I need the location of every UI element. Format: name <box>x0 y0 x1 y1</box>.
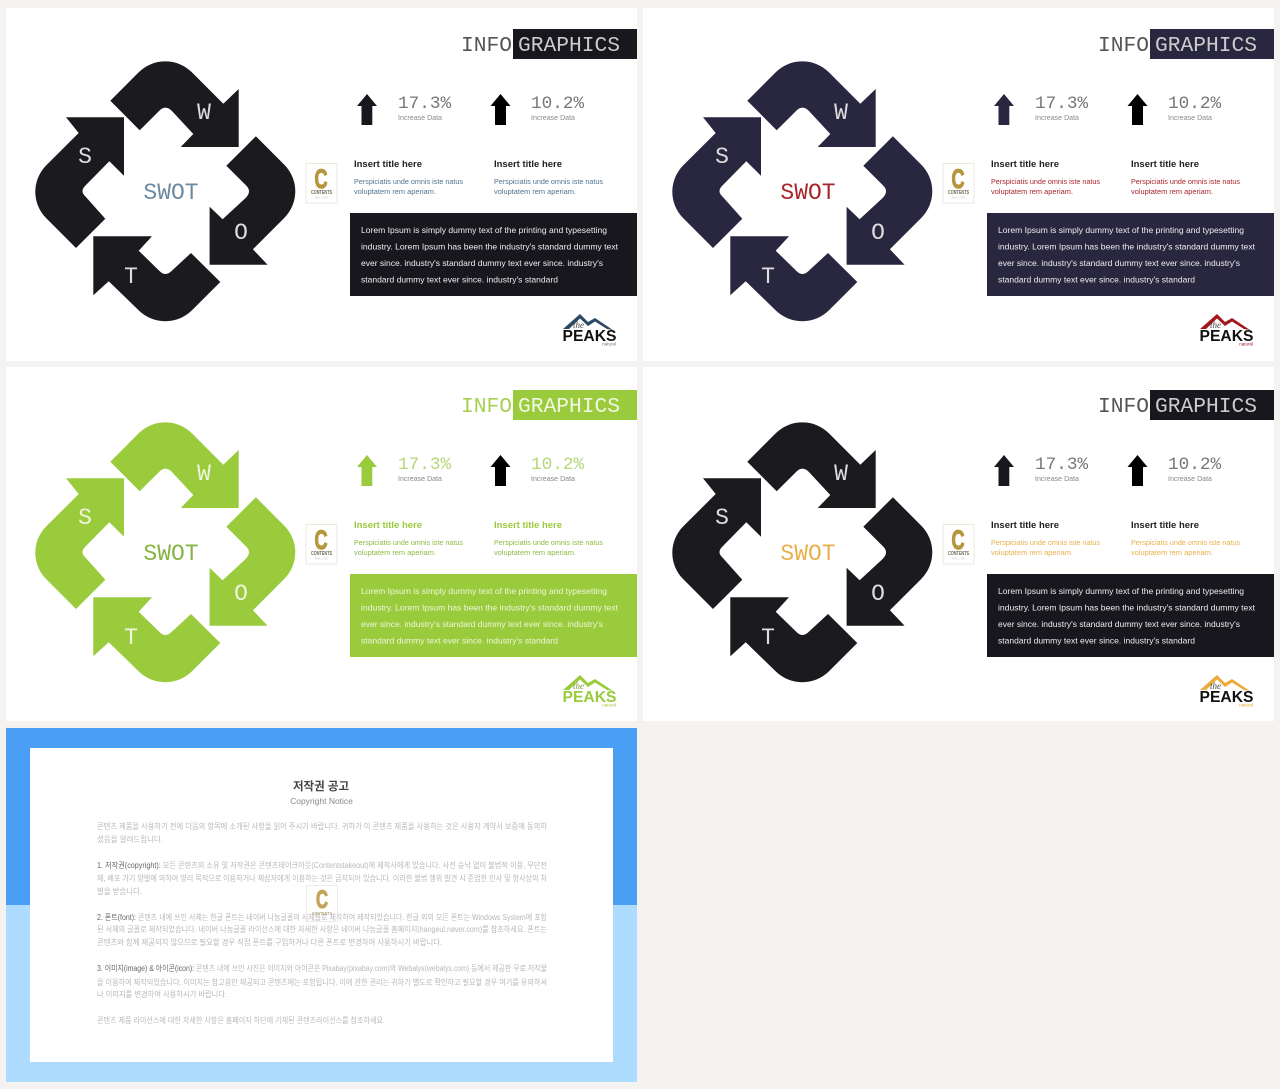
heading: infographics title: INFO <box>1098 34 1149 58</box>
text block: right column: voluptatem rem aperiam. <box>494 548 576 557</box>
chart: SWOT arrow cycle: T <box>761 625 775 651</box>
callout: lorem ipsum: standard dummy text ever since. industry's standard <box>998 636 1195 646</box>
text block: right column <box>1131 159 1240 196</box>
panel: SWOT infographic green <box>6 367 637 721</box>
text block: left column <box>991 159 1100 196</box>
text block: right column: Insert title here <box>1131 520 1199 531</box>
callout: lorem ipsum <box>350 574 637 657</box>
text block: left column: Perspiciatis unde omnis iste natus <box>991 177 1100 186</box>
callout: lorem ipsum: Lorem Ipsum is simply dummy text of the printing and typesetting <box>361 586 607 596</box>
text block: right column <box>494 520 603 557</box>
heading: infographics title: INFO <box>461 34 512 58</box>
text block: right column: Insert title here <box>1131 159 1199 170</box>
stat: 17.3%: 17.3% <box>1035 455 1088 475</box>
heading: copyright notice title <box>290 779 353 806</box>
logo: contents: C <box>952 525 964 555</box>
text block: copyright intro <box>97 821 548 844</box>
chart: SWOT arrow cycle: O <box>871 220 885 246</box>
stat: 17.3%: 17.3% <box>1035 94 1088 114</box>
logo: contents: C <box>314 525 328 555</box>
text block: left column <box>991 520 1100 557</box>
text block: left column: Perspiciatis unde omnis iste natus <box>354 538 463 547</box>
logo: peaks: the <box>1210 681 1221 691</box>
text block: copyright clause <box>97 860 547 896</box>
chart: SWOT arrow cycle: SWOT <box>143 180 199 206</box>
text block: image clause: 을 이용하여 제작되었습니다. 이미지는 참고용만 제공되고 콘텐츠에는 포함됩니다. 이에 관한 권리는 귀하가 별도로 확인하고 필요할 경우 여기를 유의하셔 <box>97 977 547 987</box>
heading: infographics title: INFO <box>1098 395 1149 419</box>
text block: right column: Perspiciatis unde omnis iste natus <box>1131 538 1240 547</box>
text block: font clause <box>97 912 548 947</box>
logo: contents watermark: CONTENTS <box>312 911 332 916</box>
stat: 17.3%: 17.3% <box>398 94 451 114</box>
text block: left column: voluptatem rem aperiam. <box>991 187 1073 196</box>
callout: lorem ipsum <box>987 574 1274 657</box>
panel: SWOT infographic dark <box>6 8 637 361</box>
chart: SWOT arrow cycle: O <box>234 581 248 607</box>
stat: 10.2% <box>1128 94 1221 125</box>
logo: contents watermark: C <box>316 886 328 914</box>
chart: SWOT arrow cycle: SWOT <box>780 541 836 567</box>
text block: right column: Insert title here <box>494 520 562 531</box>
panel: SWOT infographic navy and red <box>643 8 1274 361</box>
stat: 17.3%: Increase Data <box>1035 113 1080 122</box>
text block: left column: Insert title here <box>991 159 1059 170</box>
logo: peaks: PEAKS <box>562 328 617 345</box>
logo: peaks: natural <box>602 342 616 346</box>
panel: SWOT infographic black and orange <box>643 367 1274 721</box>
chart: SWOT arrow cycle <box>672 422 932 682</box>
callout: lorem ipsum: standard dummy text ever since. industry's standard <box>361 636 558 646</box>
logo: peaks <box>1200 675 1254 708</box>
heading: infographics title <box>461 29 637 59</box>
stat: 10.2%: Increase Data <box>531 474 576 483</box>
stat: 10.2% <box>490 94 584 125</box>
logo: peaks: natural <box>1239 342 1253 346</box>
text block: left column: Perspiciatis unde omnis iste natus <box>354 177 463 186</box>
heading: infographics title: GRAPHICS <box>518 34 620 58</box>
stat: 17.3% <box>994 94 1088 125</box>
callout: lorem ipsum: standard dummy text ever since. industry's standard <box>361 274 558 284</box>
logo: peaks <box>1200 314 1254 346</box>
heading: infographics title <box>1098 390 1274 420</box>
logo: peaks: the <box>573 320 584 330</box>
text block: left column: Perspiciatis unde omnis iste natus <box>991 538 1100 547</box>
logo: contents: CONTENTS <box>948 551 970 557</box>
text block: copyright clause: 재, 배포 가기 양벌에 의하여 영리 목적으로 이용하거나 제삼자에게 이용하는 것은 금지되어 있습니다. 이러한 불법 행위 발견 시 준엄한 민사 및 형사상의 처 <box>97 873 547 883</box>
stat: 17.3%: Increase Data <box>1035 474 1080 483</box>
chart: SWOT arrow cycle: W <box>834 100 848 126</box>
chart: SWOT arrow cycle: S <box>715 144 729 170</box>
heading: infographics title: GRAPHICS <box>518 395 620 419</box>
logo: contents: CONTENTS <box>311 551 333 557</box>
heading: infographics title: INFO <box>461 395 512 419</box>
chart: SWOT arrow cycle: SWOT <box>143 541 199 567</box>
text block: right column <box>1131 520 1240 557</box>
logo: peaks: PEAKS <box>1200 328 1254 345</box>
logo: contents: REAL CODE <box>315 196 328 200</box>
callout: lorem ipsum: Lorem Ipsum is simply dummy text of the printing and typesetting <box>998 225 1244 235</box>
text block: copyright intro: 셨음을 알려드립니다. <box>97 834 163 844</box>
heading: copyright notice title: Copyright Notice <box>290 796 353 806</box>
text block: right column <box>494 159 603 196</box>
text block: left column: Insert title here <box>354 159 422 170</box>
text block: font clause: 콘텐츠와 함께 제공되지 않으므로 필요할 경우 직접 폰트를 구입하거나 다른 폰트로 변경하여 사용하시기 바랍니다. <box>97 937 442 947</box>
logo: contents <box>943 164 974 203</box>
stat: 10.2% <box>1128 455 1221 486</box>
heading: copyright notice title: 저작권 공고 <box>293 779 349 793</box>
logo: contents: REAL CODE <box>952 556 965 560</box>
logo: peaks: the <box>1210 320 1221 330</box>
text block: left column: voluptatem rem aperiam. <box>354 548 436 557</box>
text block: copyright clause: 1. 저작권(copyright): 모든 콘텐츠의 소유 및 저작권은 콘텐츠테이크아웃(Contentstakeout)에 제작사에게 있습니다. 사전 승낙 없이 불법적 이용, 무단전 <box>97 860 547 870</box>
callout: lorem ipsum: industry. Lorem Ipsum has been the industry's standard dummy text <box>361 602 619 612</box>
stat: 10.2%: 10.2% <box>531 94 584 114</box>
callout: lorem ipsum <box>987 213 1274 296</box>
text block: right column: Insert title here <box>494 159 562 170</box>
stat: 17.3%: 17.3% <box>398 455 451 475</box>
chart: SWOT arrow cycle: T <box>124 264 138 290</box>
text block: left column: Insert title here <box>354 520 422 531</box>
stat: 17.3% <box>994 455 1088 486</box>
chart: SWOT arrow cycle: T <box>761 264 775 290</box>
callout: lorem ipsum: ever since. industry's standard dummy text ever since. industry's <box>361 258 603 268</box>
text block: license note: 콘텐츠 제품 라이선스에 대한 자세한 사항은 홈페이지 하단에 기재된 콘텐츠라이선스를 참조하세요. <box>97 1015 385 1025</box>
text block: font clause: 된 서체의 글꼴로 제작되었습니다. 네이버 나눔글꼴 라이선스에 대한 자세한 사항은 네이버 나눔글꼴 홈페이지(hangeul.naver.com)를 참조하세요. 폰트는 <box>97 924 547 934</box>
logo: contents: C <box>952 164 964 194</box>
stat: 10.2%: 10.2% <box>531 455 584 475</box>
callout: lorem ipsum: standard dummy text ever since. industry's standard <box>998 274 1195 284</box>
chart: SWOT arrow cycle: O <box>871 581 885 607</box>
stat: 17.3%: Increase Data <box>398 474 443 483</box>
text block: right column: voluptatem rem aperiam. <box>1131 187 1213 196</box>
logo: peaks: the <box>573 681 584 691</box>
text block: left column: voluptatem rem aperiam. <box>354 187 436 196</box>
text block: image clause: 3. 이미지(image) & 아이콘(icon): 콘텐츠 내에 쓰인 사진은 이미지와 아이콘은 Pixabay(pixabay.com)와 Webalys(webalys.com) 등에서 제공한 무료 저작물 <box>97 963 547 973</box>
logo: contents <box>943 524 974 564</box>
stat: 10.2%: Increase Data <box>531 113 576 122</box>
text block: image clause: 나 이미지를 변경하여 사용하시기 바랍니다. <box>97 989 227 999</box>
logo: contents watermark <box>306 886 338 922</box>
text block: right column: Perspiciatis unde omnis iste natus <box>494 177 603 186</box>
chart: SWOT arrow cycle: T <box>124 625 138 651</box>
callout: lorem ipsum: industry. Lorem Ipsum has been the industry's standard dummy text <box>998 602 1256 612</box>
chart: SWOT arrow cycle: S <box>715 505 729 531</box>
chart: SWOT arrow cycle <box>672 61 932 321</box>
callout: lorem ipsum: Lorem Ipsum is simply dummy text of the printing and typesetting <box>998 586 1244 596</box>
logo: peaks <box>562 314 617 346</box>
text block: copyright clause: 벌을 받습니다. <box>97 886 142 896</box>
text block: right column: Perspiciatis unde omnis iste natus <box>494 538 603 547</box>
chart: SWOT arrow cycle: W <box>197 461 211 487</box>
logo: peaks <box>562 675 617 708</box>
logo: contents: REAL CODE <box>315 556 328 560</box>
text block: right column: Perspiciatis unde omnis iste natus <box>1131 177 1240 186</box>
heading: infographics title: GRAPHICS <box>1155 395 1257 419</box>
stat: 17.3% <box>357 455 451 486</box>
panel: copyright notice <box>6 728 637 1082</box>
stat: 10.2%: 10.2% <box>1168 455 1221 475</box>
text block: right column: voluptatem rem aperiam. <box>494 187 576 196</box>
heading: infographics title <box>461 390 637 420</box>
logo: peaks: natural <box>602 702 616 708</box>
logo: contents: REAL CODE <box>952 196 965 200</box>
stat: 10.2%: Increase Data <box>1168 113 1213 122</box>
text block: left column <box>354 159 463 196</box>
logo: contents <box>306 524 337 564</box>
heading: infographics title <box>1098 29 1274 59</box>
callout: lorem ipsum: ever since. industry's standard dummy text ever since. industry's <box>998 258 1240 268</box>
callout: lorem ipsum: Lorem Ipsum is simply dummy text of the printing and typesetting <box>361 225 607 235</box>
chart: SWOT arrow cycle: W <box>834 461 848 487</box>
logo: peaks: PEAKS <box>562 689 617 706</box>
callout: lorem ipsum <box>350 213 637 296</box>
chart: SWOT arrow cycle: O <box>234 220 248 246</box>
text block: left column: Insert title here <box>991 520 1059 531</box>
heading: infographics title: GRAPHICS <box>1155 34 1257 58</box>
stat: 17.3%: Increase Data <box>398 113 443 122</box>
logo: peaks: PEAKS <box>1200 689 1254 706</box>
stat: 17.3% <box>357 94 451 125</box>
chart: SWOT arrow cycle: W <box>197 100 211 126</box>
logo: contents: CONTENTS <box>948 190 970 196</box>
logo: contents: CONTENTS <box>311 190 333 196</box>
chart: SWOT arrow cycle <box>35 61 295 321</box>
logo: contents <box>306 164 337 203</box>
stat: 10.2%: Increase Data <box>1168 474 1213 483</box>
callout: lorem ipsum: ever since. industry's standard dummy text ever since. industry's <box>361 619 603 629</box>
text block: copyright intro: 콘텐츠 제품을 사용하기 전에 다음의 항목에 소개된 사항을 읽어 주시기 바랍니다. 귀하가 이 콘텐츠 제품을 사용하는 것은 사용자 계약서 보증에 동의하 <box>97 821 548 831</box>
chart: SWOT arrow cycle: SWOT <box>780 180 836 206</box>
text block: image clause <box>97 963 547 999</box>
text block: left column <box>354 520 463 557</box>
text block: font clause: 2. 폰트(font): 콘텐츠 내에 쓰인 서체는 한글 폰트는 네이버 나눔글꼴의 서체들로 제작하여 제작되었습니다. 한글 외의 모든 폰트는 Windows System에 포함 <box>97 912 548 922</box>
logo: peaks: natural <box>1239 702 1253 708</box>
text block: right column: voluptatem rem aperiam. <box>1131 548 1213 557</box>
callout: lorem ipsum: industry. Lorem Ipsum has been the industry's standard dummy text <box>361 242 619 252</box>
text block: left column: voluptatem rem aperiam. <box>991 548 1073 557</box>
stat: 10.2% <box>490 455 584 486</box>
callout: lorem ipsum: industry. Lorem Ipsum has been the industry's standard dummy text <box>998 242 1256 252</box>
chart: SWOT arrow cycle: S <box>78 505 92 531</box>
callout: lorem ipsum: ever since. industry's standard dummy text ever since. industry's <box>998 619 1240 629</box>
chart: SWOT arrow cycle: S <box>78 144 92 170</box>
chart: SWOT arrow cycle <box>35 422 295 682</box>
logo: contents: C <box>314 164 328 194</box>
stat: 10.2%: 10.2% <box>1168 94 1221 114</box>
